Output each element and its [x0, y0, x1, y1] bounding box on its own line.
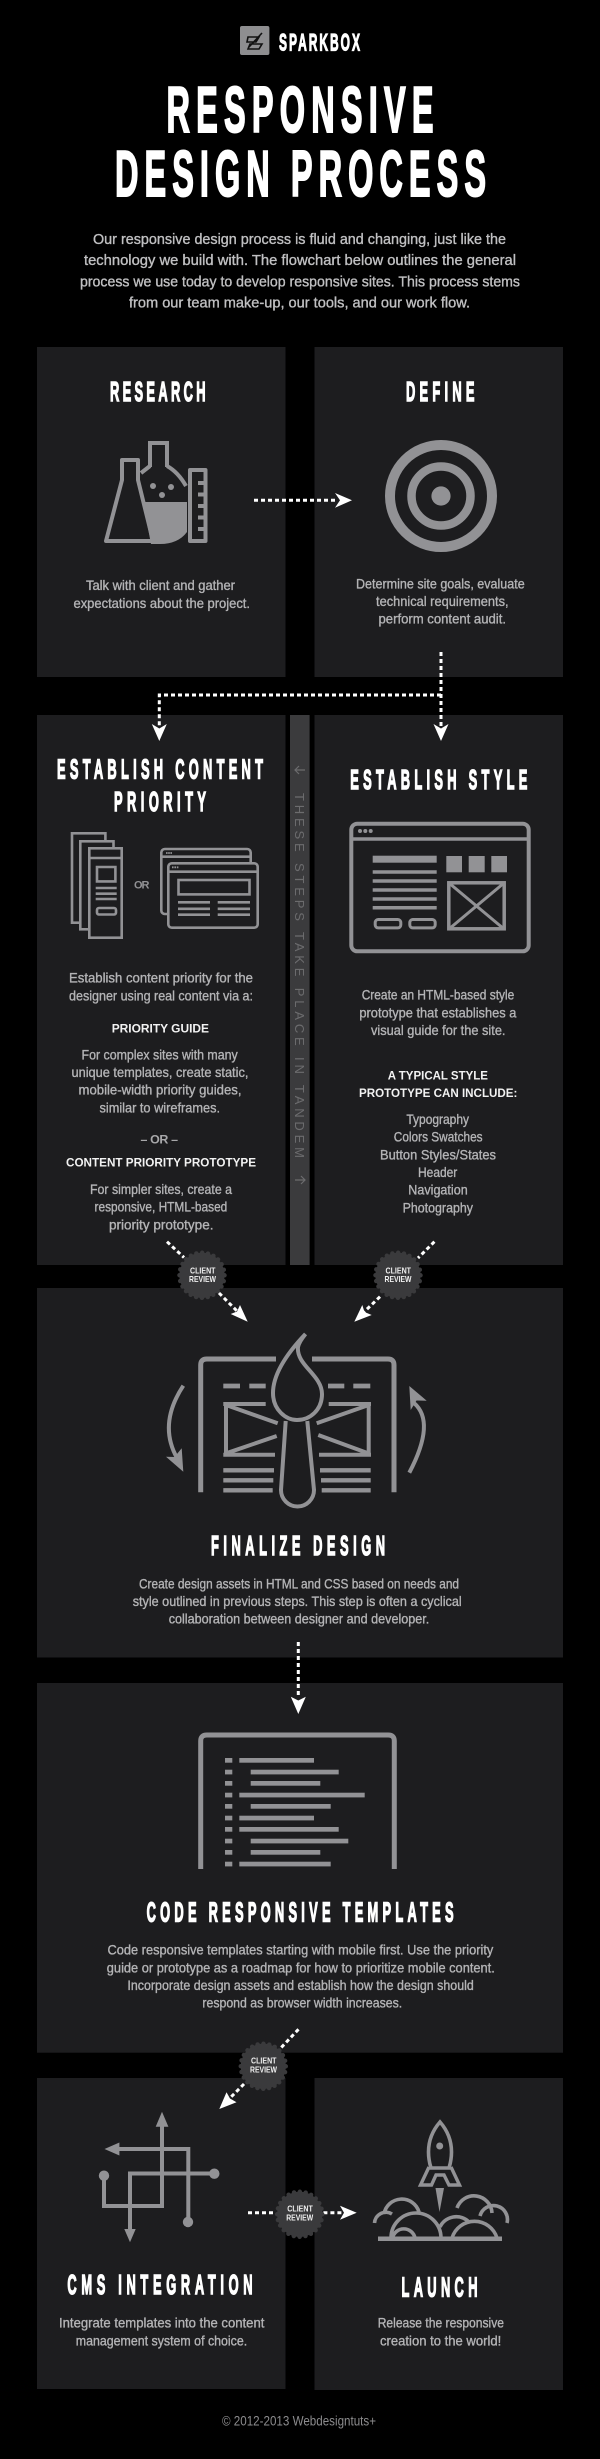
intro text: from our team make-up, our tools, and our work flow.	[129, 294, 470, 312]
subheading: typical style prototype	[359, 1069, 517, 1100]
heading: code responsive templates: CODE RESPONSIVE TEMPLATES	[147, 1896, 454, 1928]
separator: or: – OR –	[140, 1132, 178, 1146]
panel: finalize design	[37, 1288, 563, 1658]
icon: browser prototypes	[161, 849, 258, 928]
text: code responsive templates	[107, 1942, 495, 2011]
intro text: Our responsive design process is fluid and changing, just like the	[93, 231, 506, 248]
badge: client review 3: CLIENT	[251, 2055, 277, 2065]
text: cms integration: Integrate templates into the content	[59, 2315, 264, 2331]
label: or: OR	[134, 880, 150, 892]
list: style prototype items	[380, 1111, 496, 1215]
text: priority guide	[72, 1046, 248, 1115]
arrow: sidebar right	[295, 1176, 305, 1184]
list: style prototype items: Colors Swatches	[394, 1129, 483, 1145]
arrow: code templates to client review	[280, 2029, 298, 2048]
list: style prototype items: Header	[418, 1164, 458, 1180]
arrow: client review 1 to finalize design	[219, 1293, 248, 1322]
text: finalize design: collaboration between designer and developer.	[169, 1611, 429, 1627]
intro text	[80, 231, 520, 312]
subheading: typical style prototype: A TYPICAL STYLE	[388, 1069, 488, 1083]
badge: client review 3	[241, 2044, 286, 2089]
text: define: Determine site goals, evaluate	[356, 575, 525, 591]
text: content priority prototype: responsive, HTML-based	[94, 1199, 227, 1215]
text: establish style: visual guide for the site.	[371, 1022, 506, 1038]
text: launch: creation to the world!	[380, 2332, 501, 2348]
icon: mobile priority guides	[72, 833, 122, 938]
text: research	[74, 577, 250, 611]
heading: launch: LAUNCH	[402, 2271, 477, 2303]
badge: client review 4	[277, 2192, 322, 2237]
panel: cms integration	[37, 2078, 286, 2389]
text: establish style	[359, 987, 517, 1038]
text: priority guide: similar to wireframes.	[100, 1099, 220, 1115]
arrow: client review 2 to finalize design	[354, 1297, 380, 1322]
heading: establish content priority: ESTABLISH CONTENT	[57, 753, 263, 785]
text: launch: Release the responsive	[378, 2315, 504, 2331]
text: launch	[378, 2315, 504, 2348]
arrow: content priority to client review	[167, 1242, 184, 1258]
title: DESIGN PROCESS	[115, 137, 486, 210]
icon: cms routes	[99, 2112, 220, 2242]
text: content priority intro: designer using real content via a:	[69, 987, 253, 1003]
list: style prototype items: Typography	[406, 1111, 469, 1127]
list: style prototype items: Photography	[403, 1199, 473, 1215]
panel: code responsive templates	[37, 1683, 563, 2053]
text: finalize design: Create design assets in HTML and CSS based on needs and	[139, 1575, 459, 1591]
text: code responsive templates: guide or prototype as a roadmap for how to prioritize mobile content.	[107, 1959, 495, 1975]
icon: paintbrush over layout	[201, 1334, 394, 1506]
logo: Sparkbox: SPARKBOX	[279, 30, 360, 57]
panel: define	[314, 347, 563, 677]
text: content priority prototype	[90, 1181, 232, 1232]
text: code responsive templates: respond as browser width increases.	[202, 1995, 402, 2011]
arrow: cms integration to launch	[248, 2206, 357, 2220]
text: content priority prototype: priority prototype.	[109, 1216, 214, 1232]
text: research: Talk with client and gather	[86, 577, 235, 593]
heading: define: DEFINE	[406, 375, 474, 407]
icon: target	[390, 445, 492, 547]
text: define: technical requirements,	[376, 593, 509, 609]
icon: lab flasks	[106, 443, 206, 544]
arrow: finalize design to code templates	[291, 1642, 306, 1714]
text: define	[356, 575, 525, 627]
heading: cms integration: CMS INTEGRATION	[67, 2268, 253, 2300]
badge: client review 2: CLIENT	[386, 1265, 412, 1275]
icon: rocket launch	[374, 2122, 507, 2239]
subheading: content priority prototype: CONTENT PRIORITY PROTOTYPE	[66, 1156, 256, 1170]
text: establish style: Create an HTML-based style	[362, 987, 514, 1003]
footer: copyright: © 2012-2013 Webdesigntuts+	[222, 2413, 376, 2428]
text: finalize design	[133, 1575, 462, 1627]
arrow: research to define	[254, 493, 352, 508]
panel: launch	[314, 2078, 563, 2390]
badge: client review 1: CLIENT	[190, 1265, 216, 1275]
arrow: client review 3 to cms integration	[219, 2084, 244, 2109]
badge: client review 3: REVIEW	[250, 2064, 278, 2074]
text: priority guide: For complex sites with many	[82, 1046, 238, 1062]
text: cms integration	[59, 2315, 264, 2348]
arrow: sidebar left	[295, 766, 305, 774]
text: code responsive templates: Code responsive templates starting with mobile first. Use the priority	[108, 1942, 493, 1958]
arrow: cycle right	[409, 1386, 427, 1473]
heading: finalize design: FINALIZE DESIGN	[211, 1529, 385, 1561]
text: priority guide: mobile-width priority guides,	[78, 1082, 242, 1098]
badge: client review 4: REVIEW	[286, 2212, 314, 2222]
heading: research: RESEARCH	[110, 375, 205, 407]
list: style prototype items: Navigation	[408, 1182, 468, 1198]
heading: establish content priority	[57, 753, 263, 817]
list: style prototype items: Button Styles/States	[380, 1146, 496, 1162]
badge: client review 1: REVIEW	[189, 1274, 217, 1284]
intro text: technology we build with. The flowchart below outlines the general	[84, 252, 516, 269]
sidebar: these steps take place in tandem	[290, 715, 310, 1265]
text: code responsive templates: Incorporate design assets and establish how the design should	[127, 1977, 474, 1993]
text: sidebar label: THESE STEPS TAKE PLACE IN TANDEM	[292, 793, 307, 1158]
text: define: perform content audit.	[378, 611, 506, 627]
text: finalize design: style outlined in previous steps. This step is often a cyclical	[133, 1593, 462, 1609]
text: content priority intro: Establish content priority for the	[69, 970, 253, 986]
title: RESPONSIVE	[166, 73, 434, 146]
arrow: cycle left	[166, 1386, 183, 1472]
icon: style prototype window	[350, 824, 530, 951]
heading: establish style: ESTABLISH STYLE	[350, 763, 527, 795]
subheading: typical style prototype: PROTOTYPE CAN INCLUDE:	[359, 1086, 517, 1100]
badge: client review 4: CLIENT	[287, 2203, 313, 2213]
panel: establish content priority	[37, 715, 286, 1265]
panel: research	[37, 347, 286, 677]
logo: Sparkbox	[240, 26, 360, 57]
text: establish style: prototype that establishes a	[359, 1004, 517, 1020]
arrow: establish style to client review	[418, 1242, 434, 1258]
text: cms integration: management system of choice.	[76, 2332, 247, 2348]
panel: establish style	[314, 715, 563, 1265]
text: content priority prototype: For simpler sites, create a	[90, 1181, 232, 1197]
icon: code window	[201, 1735, 394, 1869]
heading: establish content priority: PRIORITY	[114, 785, 206, 817]
badge: client review 2	[376, 1253, 420, 1298]
text: priority guide: unique templates, create static,	[72, 1064, 248, 1080]
badge: client review 2: REVIEW	[384, 1274, 412, 1284]
badge: client review 1	[180, 1253, 224, 1298]
subheading: priority guide: PRIORITY GUIDE	[112, 1022, 209, 1036]
arrow: define to establish style and content priority	[152, 652, 449, 741]
text: research: expectations about the project.	[74, 595, 250, 611]
title	[115, 73, 486, 210]
text: content priority intro	[69, 970, 253, 1003]
intro text: process we use today to develop responsive sites. This process stems	[80, 274, 520, 290]
